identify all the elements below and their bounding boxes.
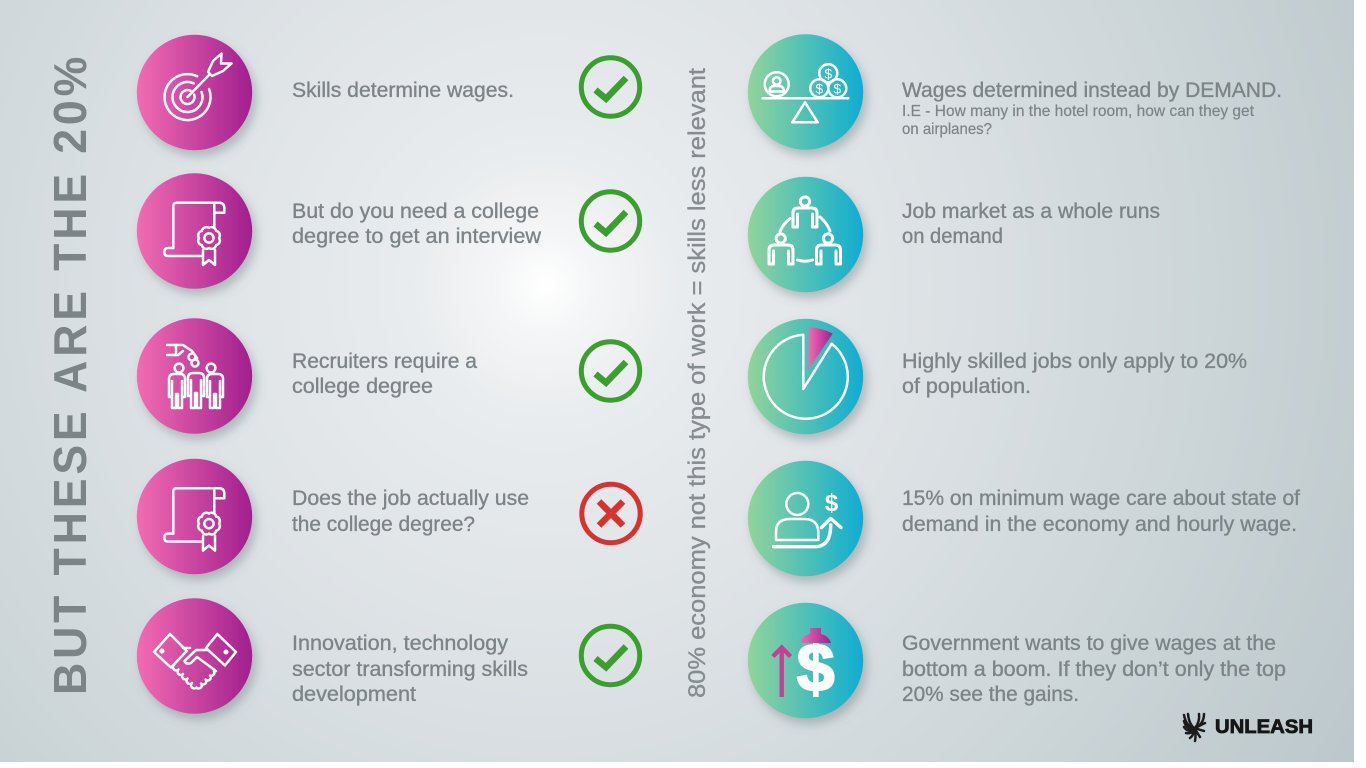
icon: check 1 xyxy=(581,58,640,116)
vertical statement: 80% economy: 80% economy not this type of work = skills less relevant xyxy=(684,68,711,698)
text: I.E - How many in the hotel room, how can they get xyxy=(902,103,1255,120)
text: demand in the economy and hourly wage. xyxy=(902,513,1297,536)
icon: target and arrow xyxy=(165,54,232,120)
text: Innovation, technology xyxy=(292,632,509,655)
text xyxy=(902,350,1247,398)
text: the college degree? xyxy=(292,513,475,536)
row 1: skills determine wages xyxy=(137,35,514,150)
text: Recruiters require a xyxy=(292,350,477,373)
text xyxy=(902,487,1300,536)
icon: diploma xyxy=(164,488,224,551)
pink circle xyxy=(137,318,252,434)
text xyxy=(292,487,529,536)
teal circle xyxy=(748,461,863,576)
row 3: 20% of population xyxy=(748,319,1247,434)
icon: person with rising wage: $ xyxy=(825,490,839,517)
text: development xyxy=(292,683,416,706)
teal circle xyxy=(748,319,863,434)
pink circle xyxy=(137,598,252,714)
text: Skills determine wages. xyxy=(292,79,514,102)
icon: rising dollar xyxy=(773,628,835,706)
text: But do you need a college xyxy=(292,200,539,223)
text xyxy=(902,632,1286,706)
text xyxy=(902,79,1282,138)
teal circle xyxy=(748,603,863,718)
text: Wages determined instead by DEMAND. xyxy=(902,79,1282,102)
text: degree to get an interview xyxy=(292,225,542,248)
panel: left column xyxy=(137,35,542,714)
icon: team of three xyxy=(769,197,840,264)
pink circle xyxy=(137,459,252,574)
wordmark: UNLEASH xyxy=(1215,716,1313,738)
row 3: recruiters xyxy=(137,318,477,434)
icon: swirl xyxy=(1184,714,1205,741)
text: Government wants to give wages at the xyxy=(902,632,1276,655)
icon: rising dollar: $ xyxy=(797,630,835,706)
text: college degree xyxy=(292,375,433,398)
text: 15% on minimum wage care about state of xyxy=(902,487,1300,510)
text: Does the job actually use xyxy=(292,487,529,510)
icon: balance scale: $ xyxy=(815,80,823,96)
teal circle xyxy=(748,34,863,150)
vertical heading: but these are the 20%: BUT THESE ARE THE 20% xyxy=(44,57,96,695)
pink circle xyxy=(137,173,252,289)
teal circle xyxy=(748,177,863,292)
text: 20% see the gains. xyxy=(902,683,1079,706)
icon: pie chart xyxy=(764,327,848,419)
icon: diploma xyxy=(164,203,224,265)
row 5: innovation xyxy=(137,598,528,714)
text: bottom a boom. If they don’t only the top xyxy=(902,658,1286,681)
row 2: college degree interview xyxy=(137,173,542,289)
logo: unleash xyxy=(1184,714,1313,741)
icon: recruiter hand and people xyxy=(167,345,223,408)
pink circle xyxy=(137,35,252,150)
text: on demand xyxy=(902,225,1003,248)
row 4: job use the degree xyxy=(137,459,529,574)
row 2: job market xyxy=(748,177,1160,292)
icon: balance scale: $ xyxy=(833,80,841,96)
row 1: wages by demand xyxy=(748,34,1282,150)
icon: check 3 xyxy=(581,342,640,400)
panel: right column xyxy=(748,34,1300,718)
text: sector transforming skills xyxy=(292,658,528,681)
panel: status marks xyxy=(581,58,640,685)
text: Job market as a whole runs xyxy=(902,200,1160,223)
icon: cross xyxy=(582,484,640,543)
text xyxy=(292,632,528,706)
text: of population. xyxy=(902,375,1031,398)
icon: balance scale xyxy=(762,64,848,122)
row 4: minimum wage xyxy=(748,461,1300,576)
text xyxy=(292,350,477,398)
text: Highly skilled jobs only apply to 20% xyxy=(902,350,1247,373)
row 5: government wages xyxy=(748,603,1286,718)
text: on airplanes? xyxy=(902,121,992,138)
icon: person with rising wage xyxy=(774,490,841,547)
icon: balance scale: $ xyxy=(824,65,832,81)
text xyxy=(292,200,542,248)
icon: handshake xyxy=(154,634,236,689)
icon: check 4 xyxy=(581,626,640,685)
icon: check 2 xyxy=(581,192,640,250)
text xyxy=(902,200,1160,248)
